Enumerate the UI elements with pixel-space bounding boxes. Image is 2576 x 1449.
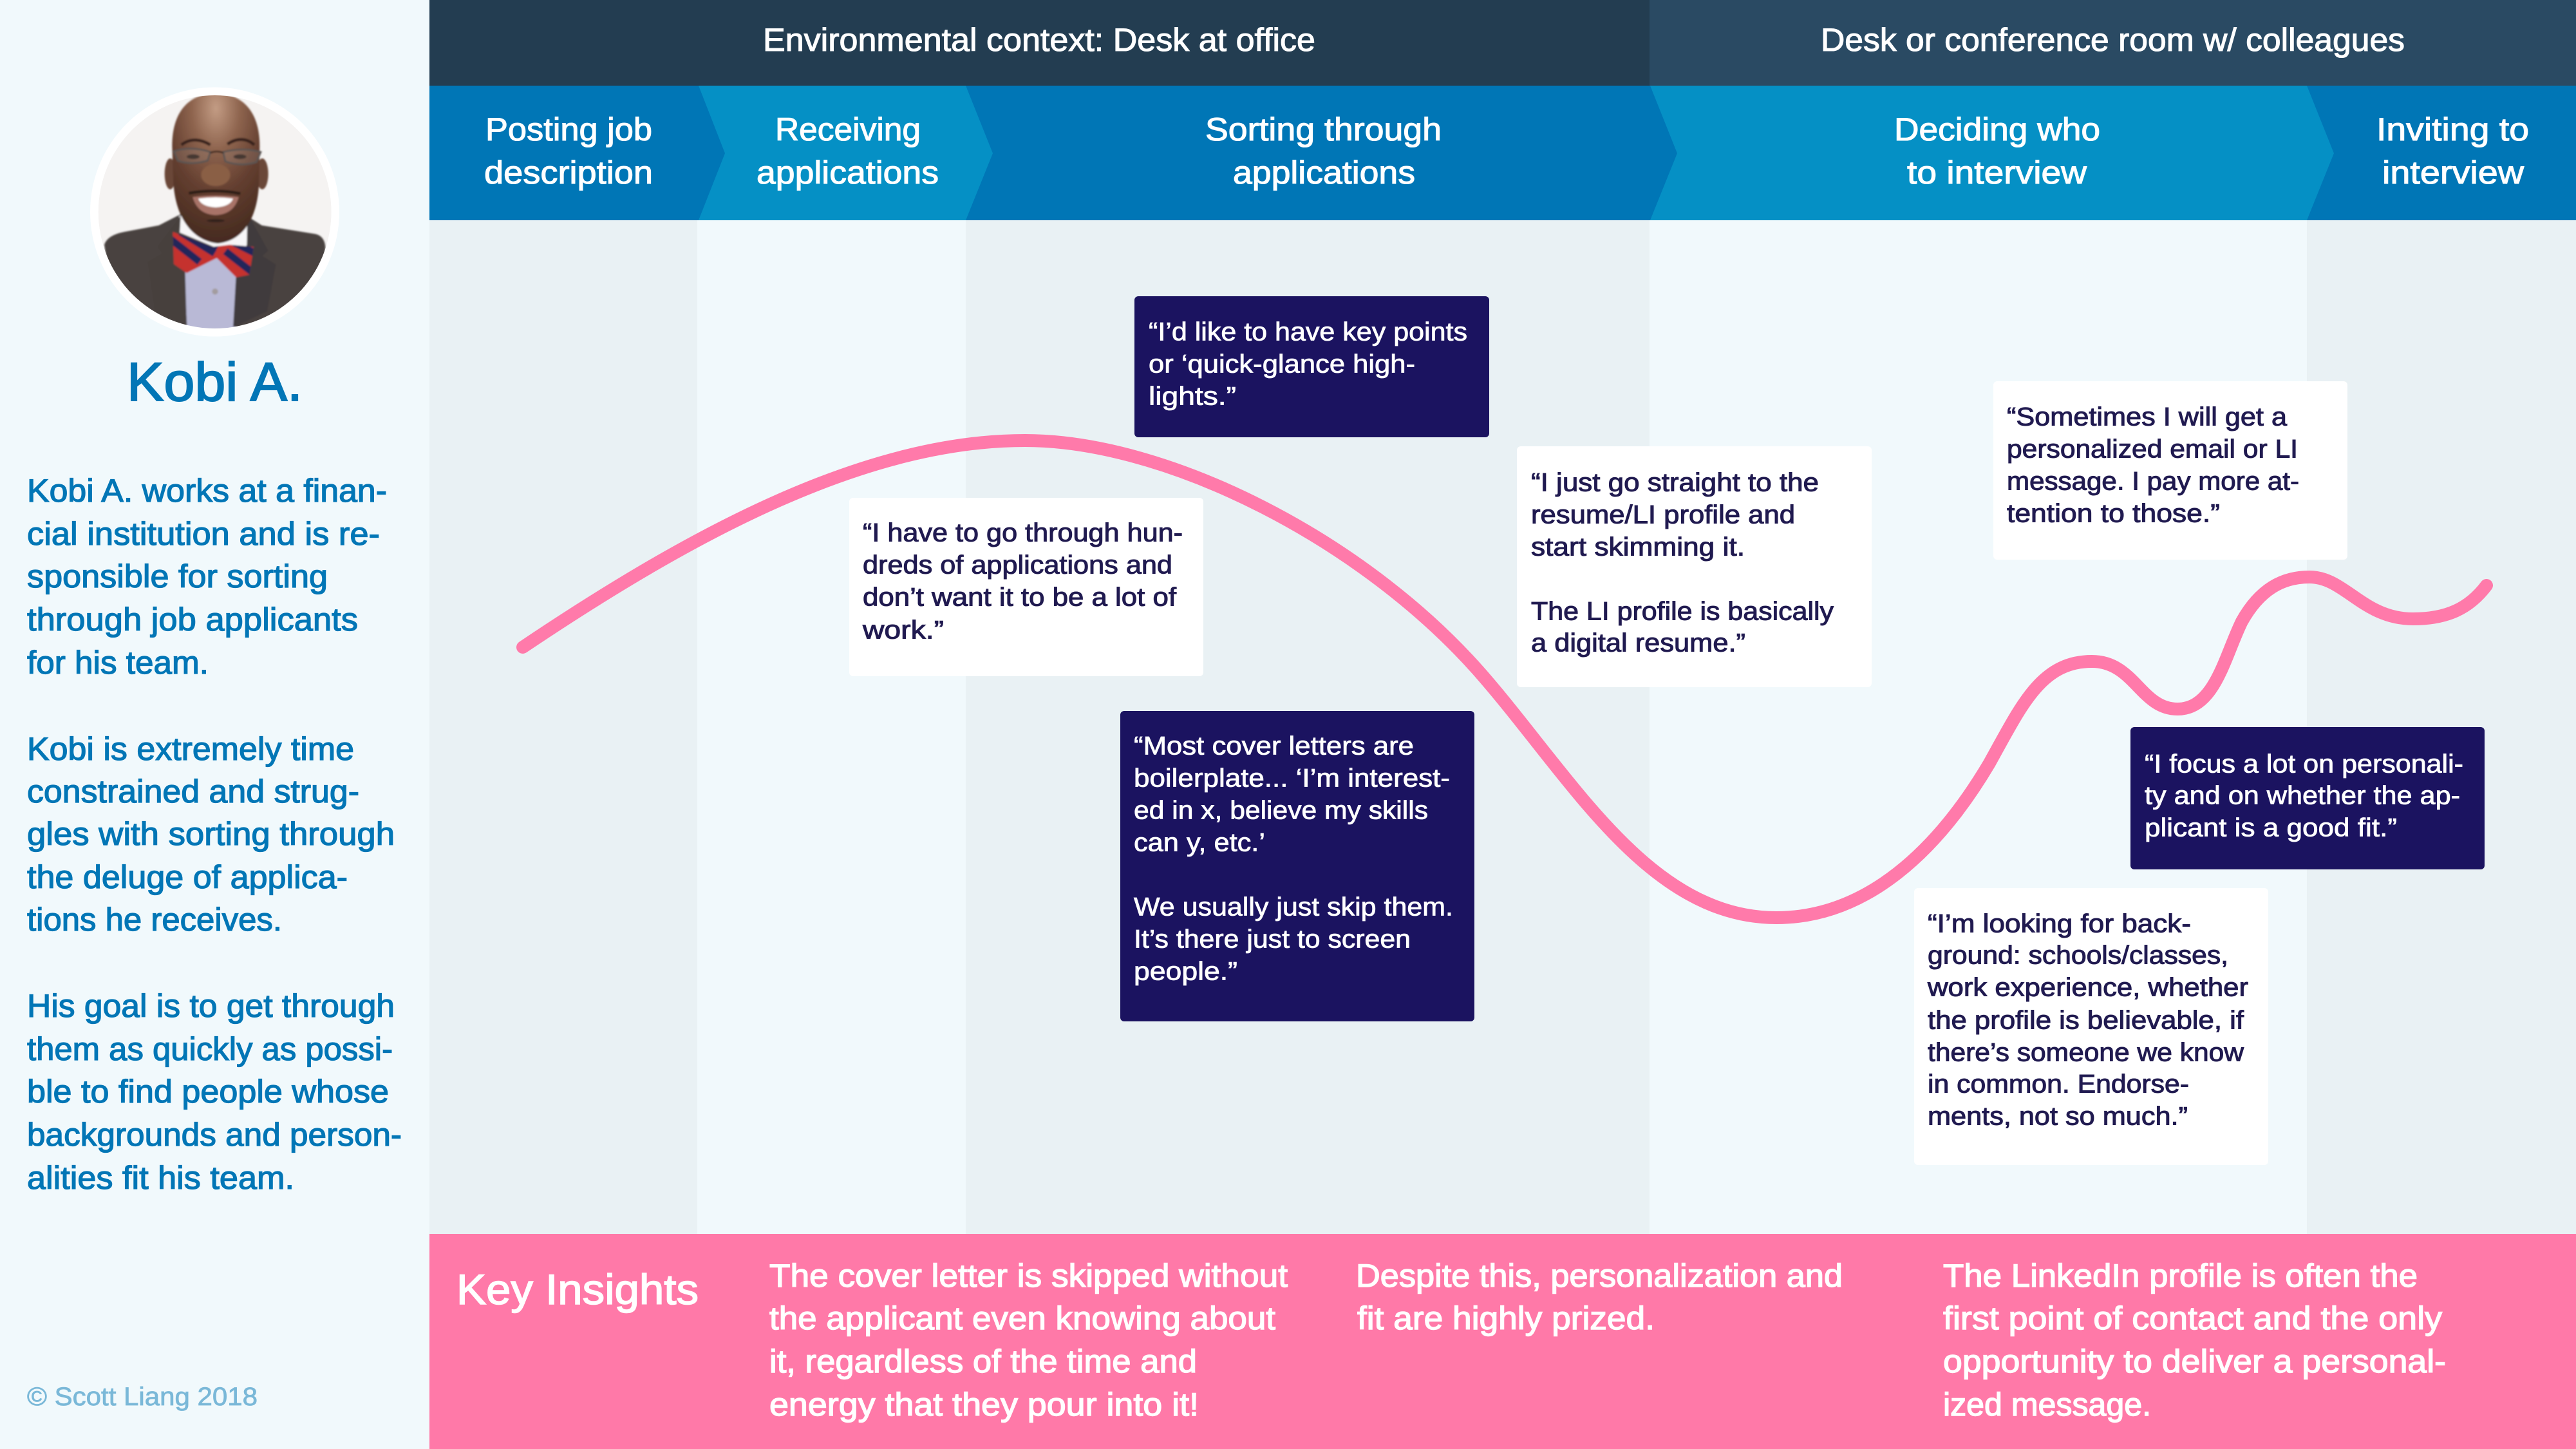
paragraph: goal: ble to find people whose	[27, 1074, 389, 1110]
quote text	[862, 519, 1183, 644]
panel: journey stages chevrons	[429, 86, 2576, 220]
paragraph: constraints: tions he receives.	[27, 902, 282, 938]
paragraph: role	[27, 473, 387, 681]
quote text: “I’m looking for back-	[1928, 909, 2191, 938]
quote text: dreds of applications and	[863, 551, 1172, 580]
stage label: deciding who to interview	[1894, 111, 2100, 191]
quote card: straight to the resume	[1517, 446, 1872, 687]
stage label: sorting through applications: Sorting through	[1205, 111, 1442, 147]
paragraph: constraints: the deluge of applica-	[27, 859, 348, 895]
quote text: can y, etc.’	[1134, 828, 1265, 857]
quote text: don’t want it to be a lot of	[863, 583, 1177, 612]
quote text: We usually just skip them.	[1134, 893, 1453, 921]
paragraph: role: for his team.	[27, 645, 209, 681]
insight: personalization and fit: Despite this, personalization and	[1356, 1258, 1843, 1294]
quote card: cover letters	[1120, 711, 1474, 1021]
quote text: ty and on whether the ap-	[2145, 782, 2460, 810]
quote text	[1531, 469, 1834, 657]
insight: cover letter: the applicant even knowing about	[769, 1300, 1275, 1336]
quote text	[1134, 732, 1453, 985]
quote text	[2145, 750, 2463, 842]
stage label: sorting through applications: applications	[1233, 155, 1415, 191]
chart: emotional journey curve	[523, 440, 2487, 918]
quote text: there’s someone we know	[1928, 1038, 2244, 1066]
stage label: inviting to interview	[2376, 111, 2529, 191]
stage label: inviting to interview: interview	[2382, 155, 2524, 191]
stage label: posting job description: description	[484, 155, 653, 191]
quote text	[1149, 318, 1467, 411]
quote text: ed in x, believe my skills	[1134, 796, 1428, 824]
quote text: resume/LI profile and	[1531, 501, 1795, 529]
quote text: “I focus a lot on personali-	[2145, 750, 2463, 778]
portrait: Kobi A.	[90, 88, 339, 337]
heading: desk at office: Environmental context: Desk at office	[763, 22, 1315, 58]
paragraph: goal: His goal is to get through	[27, 988, 395, 1024]
insight: LinkedIn profile: ized message.	[1943, 1387, 2151, 1423]
stage label: posting job description	[484, 111, 653, 191]
quote text: people.”	[1134, 957, 1237, 985]
heading: conference room: Desk or conference room w/ colleagues	[1821, 22, 2405, 58]
quote text: ground: schools/classes,	[1928, 942, 2228, 970]
quote card: key points	[1134, 296, 1489, 437]
quote text: The LI profile is basically	[1531, 598, 1834, 626]
chevron: receiving applications	[699, 86, 993, 220]
paragraph: goal: backgrounds and person-	[27, 1117, 402, 1153]
panel: persona sidebar background	[0, 0, 429, 1449]
paragraph: constraints: Kobi is extremely time	[27, 731, 354, 767]
quote card: looking for background	[1914, 888, 2268, 1165]
quote text: It’s there just to screen	[1134, 925, 1411, 953]
paragraph: role: Kobi A. works at a finan-	[27, 473, 387, 509]
paragraph: goal: alities fit his team.	[27, 1160, 294, 1196]
insight: LinkedIn profile	[1943, 1258, 2446, 1423]
insight: LinkedIn profile: first point of contact and the only	[1943, 1300, 2442, 1336]
quote text: start skimming it.	[1531, 533, 1745, 562]
quote text: work experience, whether	[1927, 974, 2248, 1002]
paragraph: role: cial institution and is re-	[27, 516, 380, 552]
quote text: message. I pay more at-	[2007, 468, 2299, 496]
quote text	[2007, 403, 2299, 528]
quote text: ments, not so much.”	[1928, 1103, 2188, 1131]
insight: LinkedIn profile: opportunity to deliver a personal-	[1943, 1343, 2446, 1379]
copyright: © Scott Liang 2018	[27, 1383, 258, 1411]
text block: persona description	[27, 473, 402, 1196]
quote text: lights.”	[1149, 383, 1236, 411]
stage label: receiving applications	[757, 111, 939, 191]
insight: LinkedIn profile: The LinkedIn profile is often the	[1943, 1258, 2418, 1294]
stage label: posting job description: Posting job	[485, 111, 652, 147]
insight: cover letter	[769, 1258, 1288, 1423]
paragraph: constraints	[27, 731, 395, 938]
stage label: receiving applications: applications	[757, 155, 939, 191]
panel: key insights	[429, 1234, 2576, 1449]
quote text	[1927, 909, 2248, 1131]
quote text: “I just go straight to the	[1531, 469, 1819, 497]
paragraph: goal	[27, 988, 402, 1196]
stage label: sorting through applications	[1205, 111, 1442, 191]
paragraph: constraints: constrained and strug-	[27, 773, 359, 810]
paragraph: goal: them as quickly as possi-	[27, 1031, 393, 1067]
paragraph: constraints: gles with sorting through	[27, 816, 395, 852]
quote text: “I have to go through hun-	[863, 519, 1183, 547]
panel: environmental context bar	[429, 0, 2576, 86]
quote text: work.”	[862, 616, 944, 644]
insight: cover letter: it, regardless of the time and	[769, 1343, 1197, 1379]
paragraph: role: sponsible for sorting	[27, 558, 328, 594]
panel: journey bands	[429, 220, 2576, 1234]
quote text: tention to those.”	[2007, 500, 2220, 528]
insight: personalization and fit	[1356, 1258, 1843, 1336]
quote card: hundreds of applications	[849, 498, 1203, 676]
quote text: or ‘quick-glance high-	[1149, 350, 1415, 379]
name: Kobi A.: Kobi A.	[127, 352, 303, 412]
quote text: “Most cover letters are	[1134, 732, 1414, 760]
chevron: deciding who to interview	[1650, 86, 2334, 220]
quote text: a digital resume.”	[1531, 629, 1745, 657]
paragraph: role: through job applicants	[27, 601, 358, 638]
quote text: the profile is believable, if	[1928, 1006, 2244, 1034]
stage label: deciding who to interview: Deciding who	[1894, 111, 2100, 147]
quote text: personalized email or LI	[2007, 435, 2298, 464]
insight: personalization and fit: fit are highly prized.	[1357, 1300, 1655, 1336]
stage label: deciding who to interview: to interview	[1907, 155, 2087, 191]
insight: cover letter: The cover letter is skipped without	[769, 1258, 1288, 1294]
stage label: inviting to interview: Inviting to	[2376, 111, 2529, 147]
quote text: in common. Endorse-	[1928, 1070, 2189, 1099]
quote card: personality and fit	[2130, 727, 2485, 869]
quote text: “Sometimes I will get a	[2007, 403, 2288, 431]
quote card: personalized message	[1993, 381, 2347, 560]
insight: cover letter: energy that they pour into it!	[769, 1387, 1199, 1423]
quote text: plicant is a good fit.”	[2145, 814, 2397, 842]
quote text: “I’d like to have key points	[1149, 318, 1467, 346]
stage label: receiving applications: Receiving	[775, 111, 921, 147]
heading: key insights: Key Insights	[456, 1265, 699, 1313]
quote text: boilerplate... ‘I’m interest-	[1134, 764, 1450, 792]
